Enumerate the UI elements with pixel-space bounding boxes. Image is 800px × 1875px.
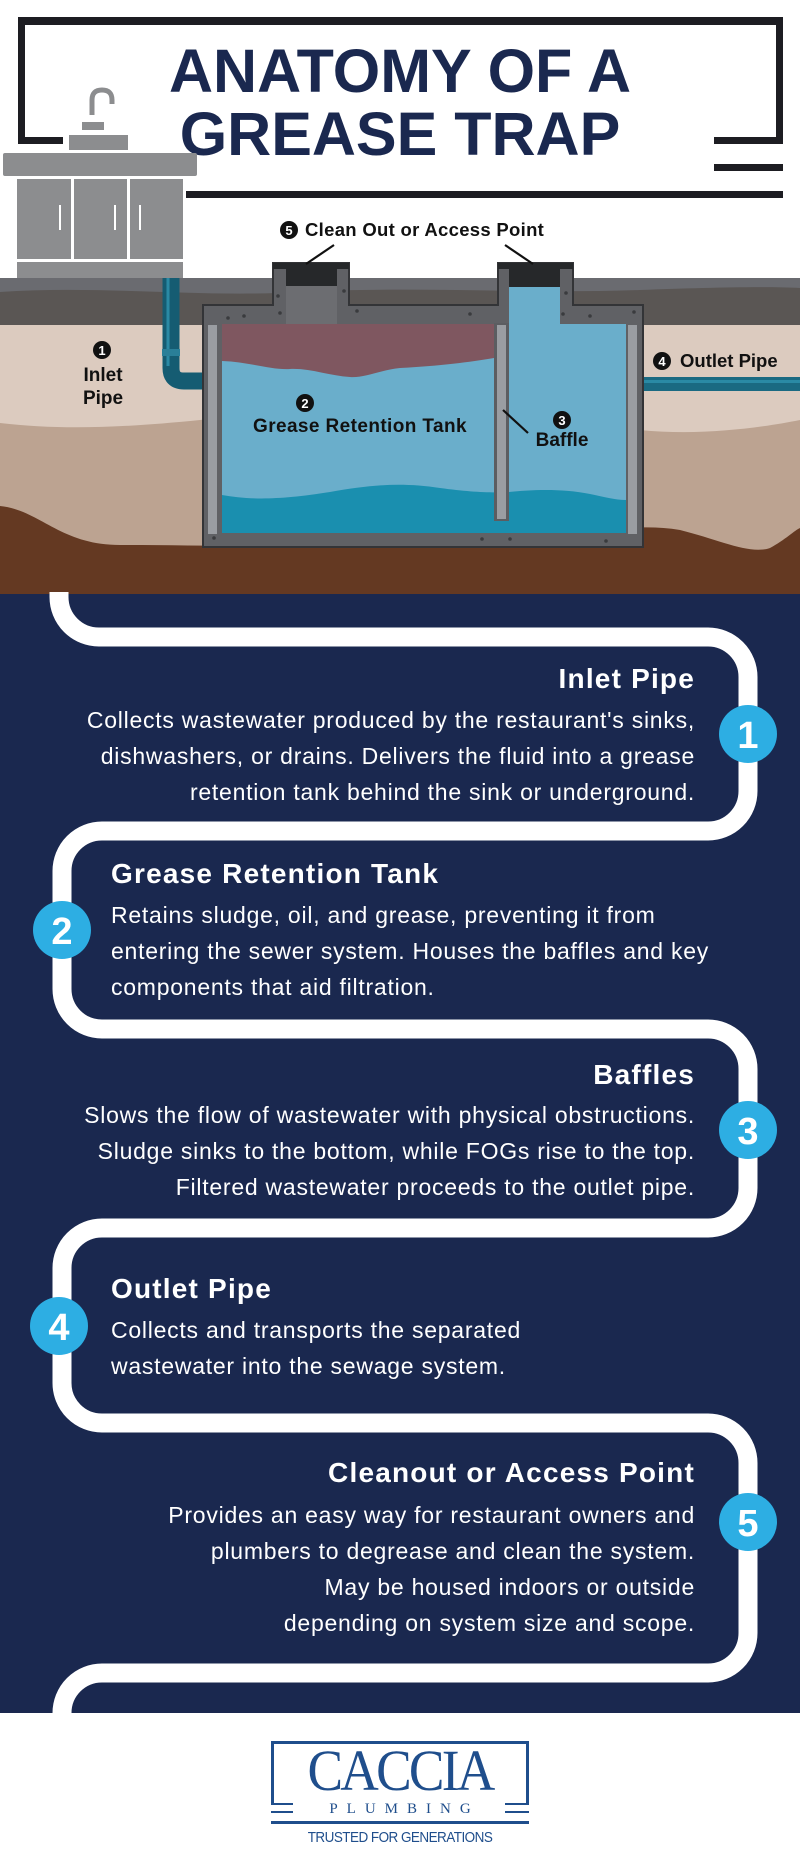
title: ANATOMY OF A [169,37,631,105]
step 2: grease retention tank: components that aid filtration. [111,974,435,1000]
diagram labels: Grease Retention Tank [253,416,467,437]
step 5: cleanout or access point: depending on system size and scope. [284,1610,695,1636]
step 5: cleanout or access point: Provides an easy way for restaurant owners and [168,1502,695,1528]
step 4: outlet pipe [111,1273,521,1379]
leader lines [306,245,533,433]
step 5: cleanout or access point [168,1457,695,1636]
diagram: grease trap illustration [0,17,800,594]
step 5: cleanout or access point: Cleanout or Access Point [328,1457,695,1488]
winding path with number badges: 3 [737,1111,759,1153]
logo: Caccia Plumbing: PLUMBING [329,1801,480,1817]
diagram labels: Outlet Pipe [680,350,778,371]
winding path with number badges: 2 [51,911,73,953]
step 3: baffles [84,1059,695,1200]
step 4: outlet pipe: wastewater into the sewage system. [111,1353,506,1379]
step 2: grease retention tank: entering the sewer system. Houses the baffles and key [111,938,709,964]
step 1: inlet pipe [87,663,695,805]
step 3: baffles: Baffles [593,1059,695,1090]
diagram labels: Inlet [83,365,123,386]
diagram labels: Baffle [536,430,588,451]
diagram labels: 2 [301,396,309,411]
diagram labels: Pipe [83,388,123,409]
step 3: baffles: Filtered wastewater proceeds to the outlet pipe. [176,1174,695,1200]
sink [3,90,197,278]
step 3: baffles: Slows the flow of wastewater with physical obstructions. [84,1102,695,1128]
winding path with number badges: 4 [48,1307,70,1349]
step 2: grease retention tank [111,858,709,1000]
winding path with number badges: 5 [737,1503,759,1545]
logo: Caccia Plumbing: CACCIA [307,1738,493,1803]
diagram labels: 5 [285,223,293,238]
title frame [18,17,783,198]
title [169,37,631,168]
step 2: grease retention tank: Grease Retention Tank [111,858,439,889]
step 5: cleanout or access point: May be housed indoors or outside [324,1574,695,1600]
ground layers [0,278,800,594]
diagram labels: 4 [658,354,666,369]
inlet pipe [162,278,204,381]
step 4: outlet pipe: Collects and transports the separated [111,1317,521,1343]
winding path with number badges: 1 [737,715,759,757]
step 1: inlet pipe: Inlet Pipe [559,663,695,694]
step 4: outlet pipe: Outlet Pipe [111,1273,272,1304]
step 3: baffles: Sludge sinks to the bottom, while FOGs rise to the top. [98,1138,695,1164]
diagram labels [83,219,778,451]
tank [203,263,643,547]
logo: Caccia Plumbing: TRUSTED FOR GENERATIONS [308,1829,492,1846]
step 1: inlet pipe: Collects wastewater produced by the restaurant's sinks, [87,707,695,733]
outlet pipe [642,377,800,391]
logo: Caccia Plumbing [271,1738,529,1846]
diagram labels: 3 [558,413,566,428]
panel: steps section [0,594,800,1713]
title: GREASE TRAP [180,100,620,168]
step 1: inlet pipe: retention tank behind the sink or underground. [190,779,695,805]
diagram labels: Clean Out or Access Point [305,219,544,240]
diagram labels: 1 [98,343,106,358]
step 1: inlet pipe: dishwashers, or drains. Delivers the fluid into a grease [101,743,695,769]
step 2: grease retention tank: Retains sludge, oil, and grease, preventing it from [111,902,656,928]
step 5: cleanout or access point: plumbers to degrease and clean the system. [211,1538,695,1564]
